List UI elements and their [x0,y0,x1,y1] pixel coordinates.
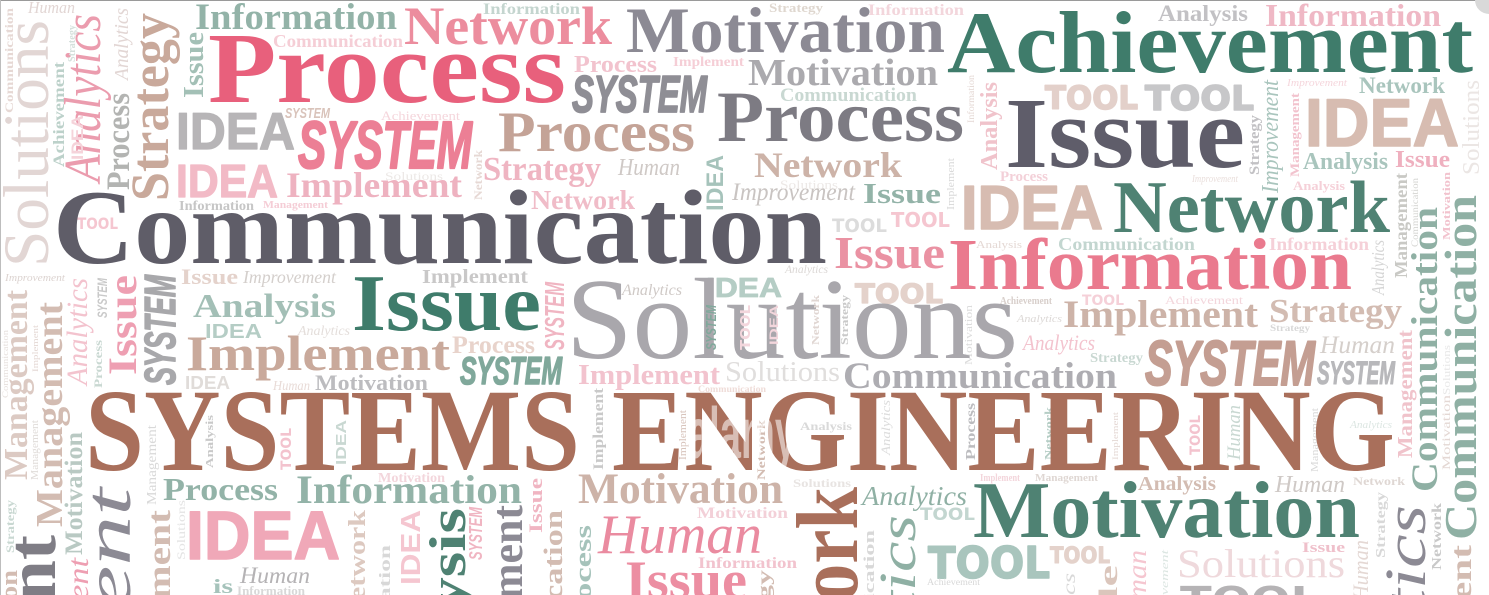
background words: middle: Implement [1063,293,1258,336]
background words: top centre: Implement [946,158,957,210]
background words: top left: Process [101,93,137,190]
title: Systems Engineering: SYSTEMS [85,365,580,496]
background words: top right: Management [1287,92,1302,177]
word: Process (grey): Process [717,77,964,157]
background words: top centre: Strategy [769,0,824,15]
background words: top right: Strategy [1247,114,1263,175]
background words: top left: Communication [273,31,403,51]
background words: behind and beneath the title: Implement [1111,411,1120,460]
background words: behind and beneath the title: Implement [678,410,689,460]
background words: top left [0,0,528,289]
background words: top centre: Strategy [483,151,601,188]
background words: middle: Analysis [193,288,336,325]
background words: top right: Communication [1058,234,1195,254]
background words: top centre: Issue [863,179,941,210]
background words: top right: Improvement [1286,77,1348,89]
background words: bottom: Strategy [3,500,17,553]
background words: top left: Network [471,150,485,200]
background words: middle: Management [145,425,160,505]
background words: top centre: Improvement [731,179,856,206]
background words: bottom: Solutions [793,476,851,490]
background words: middle [0,274,1402,555]
background words: top left: Improvement [242,267,337,287]
background words: top centre: Information [966,74,976,123]
background words: top left: Strategy [67,25,78,62]
background words: top centre [483,0,1103,310]
background words: middle: Analytics [61,278,94,387]
background words: top left: Information [179,199,254,214]
background words: middle: Strategy [1270,323,1311,333]
background words: behind and beneath the title: Network [1043,406,1055,460]
background words: top centre: IDEA [961,174,1103,243]
top edge line [0,0,1489,1]
background words: bottom: TOOL [920,505,975,525]
background words: top left: Analytics [111,8,133,82]
background words: behind and beneath the title: Analysis [800,419,852,433]
background words: middle: SYSTEM [539,282,570,350]
background words: bottom: Motivation [578,466,783,513]
background words: top centre: Process [498,101,695,164]
background words: middle: SYSTEM [1317,355,1396,391]
background words: behind and beneath the title: Network [754,420,768,480]
background words: bottom: Information [296,467,522,512]
background words: behind and beneath the title: Motivation [1439,395,1453,470]
background words: top left: Improvement [4,272,66,284]
background words: top right: Process [1000,169,1048,185]
background words: middle: Analysis [204,414,216,468]
background words: top left: Communication [2,8,16,113]
background words: middle: IDEA [205,321,262,343]
background words: bottom: Network [1430,503,1445,570]
background words: top centre: TOOL [855,279,943,310]
small words over Solutions: SYSTEM [703,305,720,350]
background words: behind and beneath the title: Implement [591,388,607,470]
background words: top right: Communication [1435,195,1486,540]
background words: top centre: Analysis [976,239,1022,251]
background words: middle: Strategy [1269,293,1402,330]
background words: top centre: Issue [834,227,945,278]
small words over Solutions: IDEA [767,305,781,345]
background words: middle: SYSTEM [460,350,563,393]
title: Systems Engineering: ENGINEERING [612,365,1395,496]
background words: middle: Communication [1,330,10,398]
background words: top right: Issue [1395,147,1450,173]
background words: top left: TOOL [77,214,118,233]
background words: bottom: Human [239,563,310,588]
background words: middle: Analytics [1021,330,1095,355]
background words: bottom: Issue [526,478,547,533]
background words: top left: SYSTEM [285,105,330,122]
background words: middle: Management [30,420,41,480]
small words over Solutions: Network [810,294,822,345]
background words: bottom: Human [597,504,762,566]
corner badge [1475,0,1489,14]
background words: top right: Analysis [1158,1,1248,26]
background words: middle: Strategy [1090,351,1143,366]
background words: top centre: TOOL [891,208,950,232]
background words: top centre: Information [483,1,580,18]
background words: top left: Implement [422,266,528,288]
background words: top centre: Information [868,2,964,19]
word: SYSTEM (rose italic): SYSTEM [298,108,473,183]
background words: bottom: Analytics [860,481,967,511]
background words: bottom: IDEA [395,510,426,585]
background words: top centre: TOOL [832,215,887,237]
background words: top right: Network [1359,73,1445,98]
background words: top left: Achievement [381,108,460,123]
background words: top left: IDEA [176,155,278,207]
background words: middle: Management [29,302,71,527]
background words: bottom: Motivation [697,505,788,522]
background words: top centre: Solutions [780,177,838,192]
background words: top right: TOOL [1145,79,1254,119]
background words: behind and beneath the title: Analytics [878,400,893,456]
background words: bottom: Strategy [1374,492,1389,558]
background words: behind and beneath the title [591,330,1453,498]
background words: middle: Analytics [1016,313,1062,325]
background words: top left: Implement [286,165,462,205]
word: Process (rose): Process [208,12,566,124]
background words: middle: Solutions [725,357,840,388]
background words: middle: Human [272,379,310,394]
background words: behind and beneath the title: Solutions [1441,345,1453,395]
background words: middle: Motivation [61,432,88,555]
background words: middle: Implement [578,360,721,391]
background words: top left: IDEA [68,115,87,160]
background words: middle: Motivation [964,305,975,365]
background words: top left: IDEA [176,103,295,161]
background words: top left: Management [263,200,329,211]
background words: top centre: Network [754,145,902,185]
background words: top centre: Communication [780,85,917,106]
background words: middle: SYSTEM [1145,329,1316,399]
background words: bottom [0,466,1478,595]
background words: behind and beneath the title: Implement [980,473,1021,484]
word: Network (teal): Network [1113,167,1391,249]
background words: top centre: Implement [673,55,744,70]
background words: middle: Motivation [315,370,428,395]
background words: top left: Strategy [120,13,180,201]
background words: middle: Analytics [297,324,351,339]
background words: middle: Implement [31,324,40,372]
title: Systems Engineering [85,365,1395,496]
background words: middle: IDEA [333,420,350,465]
background words: top right: Communication [1405,207,1446,492]
word: Communication: Communication [53,169,827,286]
background words: behind and beneath the title: Management [1035,473,1099,484]
background words: middle: Human [1319,332,1395,359]
background words: bottom: Process [163,471,278,507]
background words: bottom: SYSTEM [466,506,486,560]
background words: top right: Communication [1410,177,1420,247]
background words: bottom: TOOL [1050,544,1110,569]
background words: top left: Issue [179,32,210,98]
background words: bottom: Motivation [378,471,445,486]
word: Information (rose): Information [948,224,1352,305]
background words: top right: Improvement [1258,79,1284,194]
word: Issue (dark): Issue [1005,77,1245,189]
background words: top right: Analysis [1293,178,1345,193]
small words over Solutions: Strategy [839,294,851,345]
background words: bottom: IDEA [186,497,340,574]
background words: top centre: SYSTEM [572,66,708,124]
small words over Solutions: TOOL [739,305,754,350]
background words: middle: Communication [698,384,766,394]
background words: top centre: IDEA [706,272,782,303]
background words: bottom: cs [1059,573,1079,595]
background words: top centre: IDEA [702,155,729,211]
background words: behind and beneath the title: Analysis [1138,473,1216,495]
background words: top right: IDEA [1305,85,1459,161]
background words: behind and beneath the title: Human [1274,472,1345,498]
background words: top right: Analytics [1368,240,1388,296]
background words: middle: SYSTEM [136,274,185,385]
background words: behind and beneath the title: Management [1310,408,1321,472]
background words: top right: Motivation [1441,172,1453,240]
background words: top centre: Analysis [977,82,1003,170]
background words: top centre: Analytics [621,282,682,299]
background words: top centre: Process [574,52,657,78]
small words over Solutions [703,294,851,350]
background words: bottom: Achievement [927,577,981,587]
background words: top right: Information [1269,234,1369,254]
background words: middle: Issue [100,275,145,375]
background words: middle: Implement [186,325,450,381]
background words: top right: Improvement [1191,174,1238,185]
background words: middle: TOOL [279,428,295,470]
background words: top left: Solutions [385,169,443,183]
background words: middle: Achievement [1000,295,1052,307]
background words: middle: SYSTEM [94,278,110,318]
background words: behind and beneath the title: Analytics [1349,419,1392,431]
background words: bottom: Information [698,555,797,572]
word: Motivation (teal): Motivation [973,467,1360,555]
background words: top right: Solutions [1459,80,1485,175]
word: Issue (teal): Issue [352,260,541,348]
background words: top right [1000,0,1486,540]
background words: behind and beneath the title: Human [1224,405,1245,461]
background words: bottom: Solutions [174,500,188,560]
background words: bottom: Issue [1302,540,1345,556]
left edge line [0,0,1,595]
word: Solutions (large grey): Solutions [566,256,1018,384]
background words: middle: Communication [843,356,1117,397]
background words: middle: Process [452,332,535,359]
background words: top left: Achievement [51,61,68,167]
background words: bottom: vement [1159,549,1171,595]
background words: top centre: Human [617,155,680,181]
background words: middle: Achievement [1165,293,1244,307]
background words: behind and beneath the title: Network [1353,474,1405,488]
watermark: alamy [688,394,796,474]
background words: top left: Issue [181,264,238,289]
background words: behind and beneath the title: TOOL [1188,415,1204,455]
background words: top right: Analysis [1303,149,1388,175]
background words: middle: IDEA [185,373,230,393]
background words: behind and beneath the title: Management [1393,330,1417,458]
background words: bottom: Solutions [1177,541,1345,586]
background words: middle: Process [91,340,105,388]
background words: bottom: TOOL [928,538,1050,589]
background words: top right: TOOL [1045,79,1138,117]
background words: behind and beneath the title: Process [964,402,979,460]
background words: top right: Management [1391,173,1411,278]
background words: middle: TOOL [1082,293,1124,309]
background words: top centre: Network [531,185,635,215]
background words: top centre: Analytics [784,262,828,276]
background words: top centre: Motivation [748,52,938,94]
